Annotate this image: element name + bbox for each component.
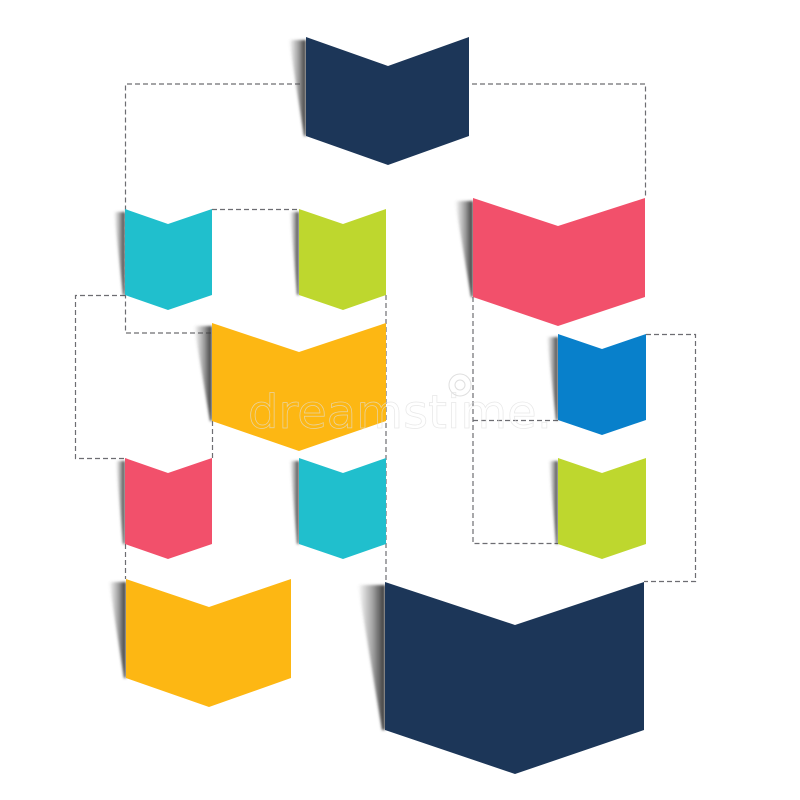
watermark: dreamstime. xyxy=(248,385,552,439)
chevron: large red right xyxy=(473,198,645,326)
chevron: teal lower middle xyxy=(299,458,386,559)
chevron: large navy bottom xyxy=(385,582,644,774)
dashed connector lines xyxy=(76,84,696,582)
chevron: blue right xyxy=(558,334,646,435)
chevron: teal upper left xyxy=(125,209,212,310)
chevron: large amber middle xyxy=(212,323,386,451)
chevron: lime lower right xyxy=(558,458,646,559)
chevron: lime upper middle xyxy=(299,209,386,310)
shadow: box shadows on left edges xyxy=(109,40,558,730)
chevron: top navy xyxy=(306,37,469,165)
chevron: large amber lower left xyxy=(126,579,291,707)
chevron: small red left xyxy=(125,458,212,559)
